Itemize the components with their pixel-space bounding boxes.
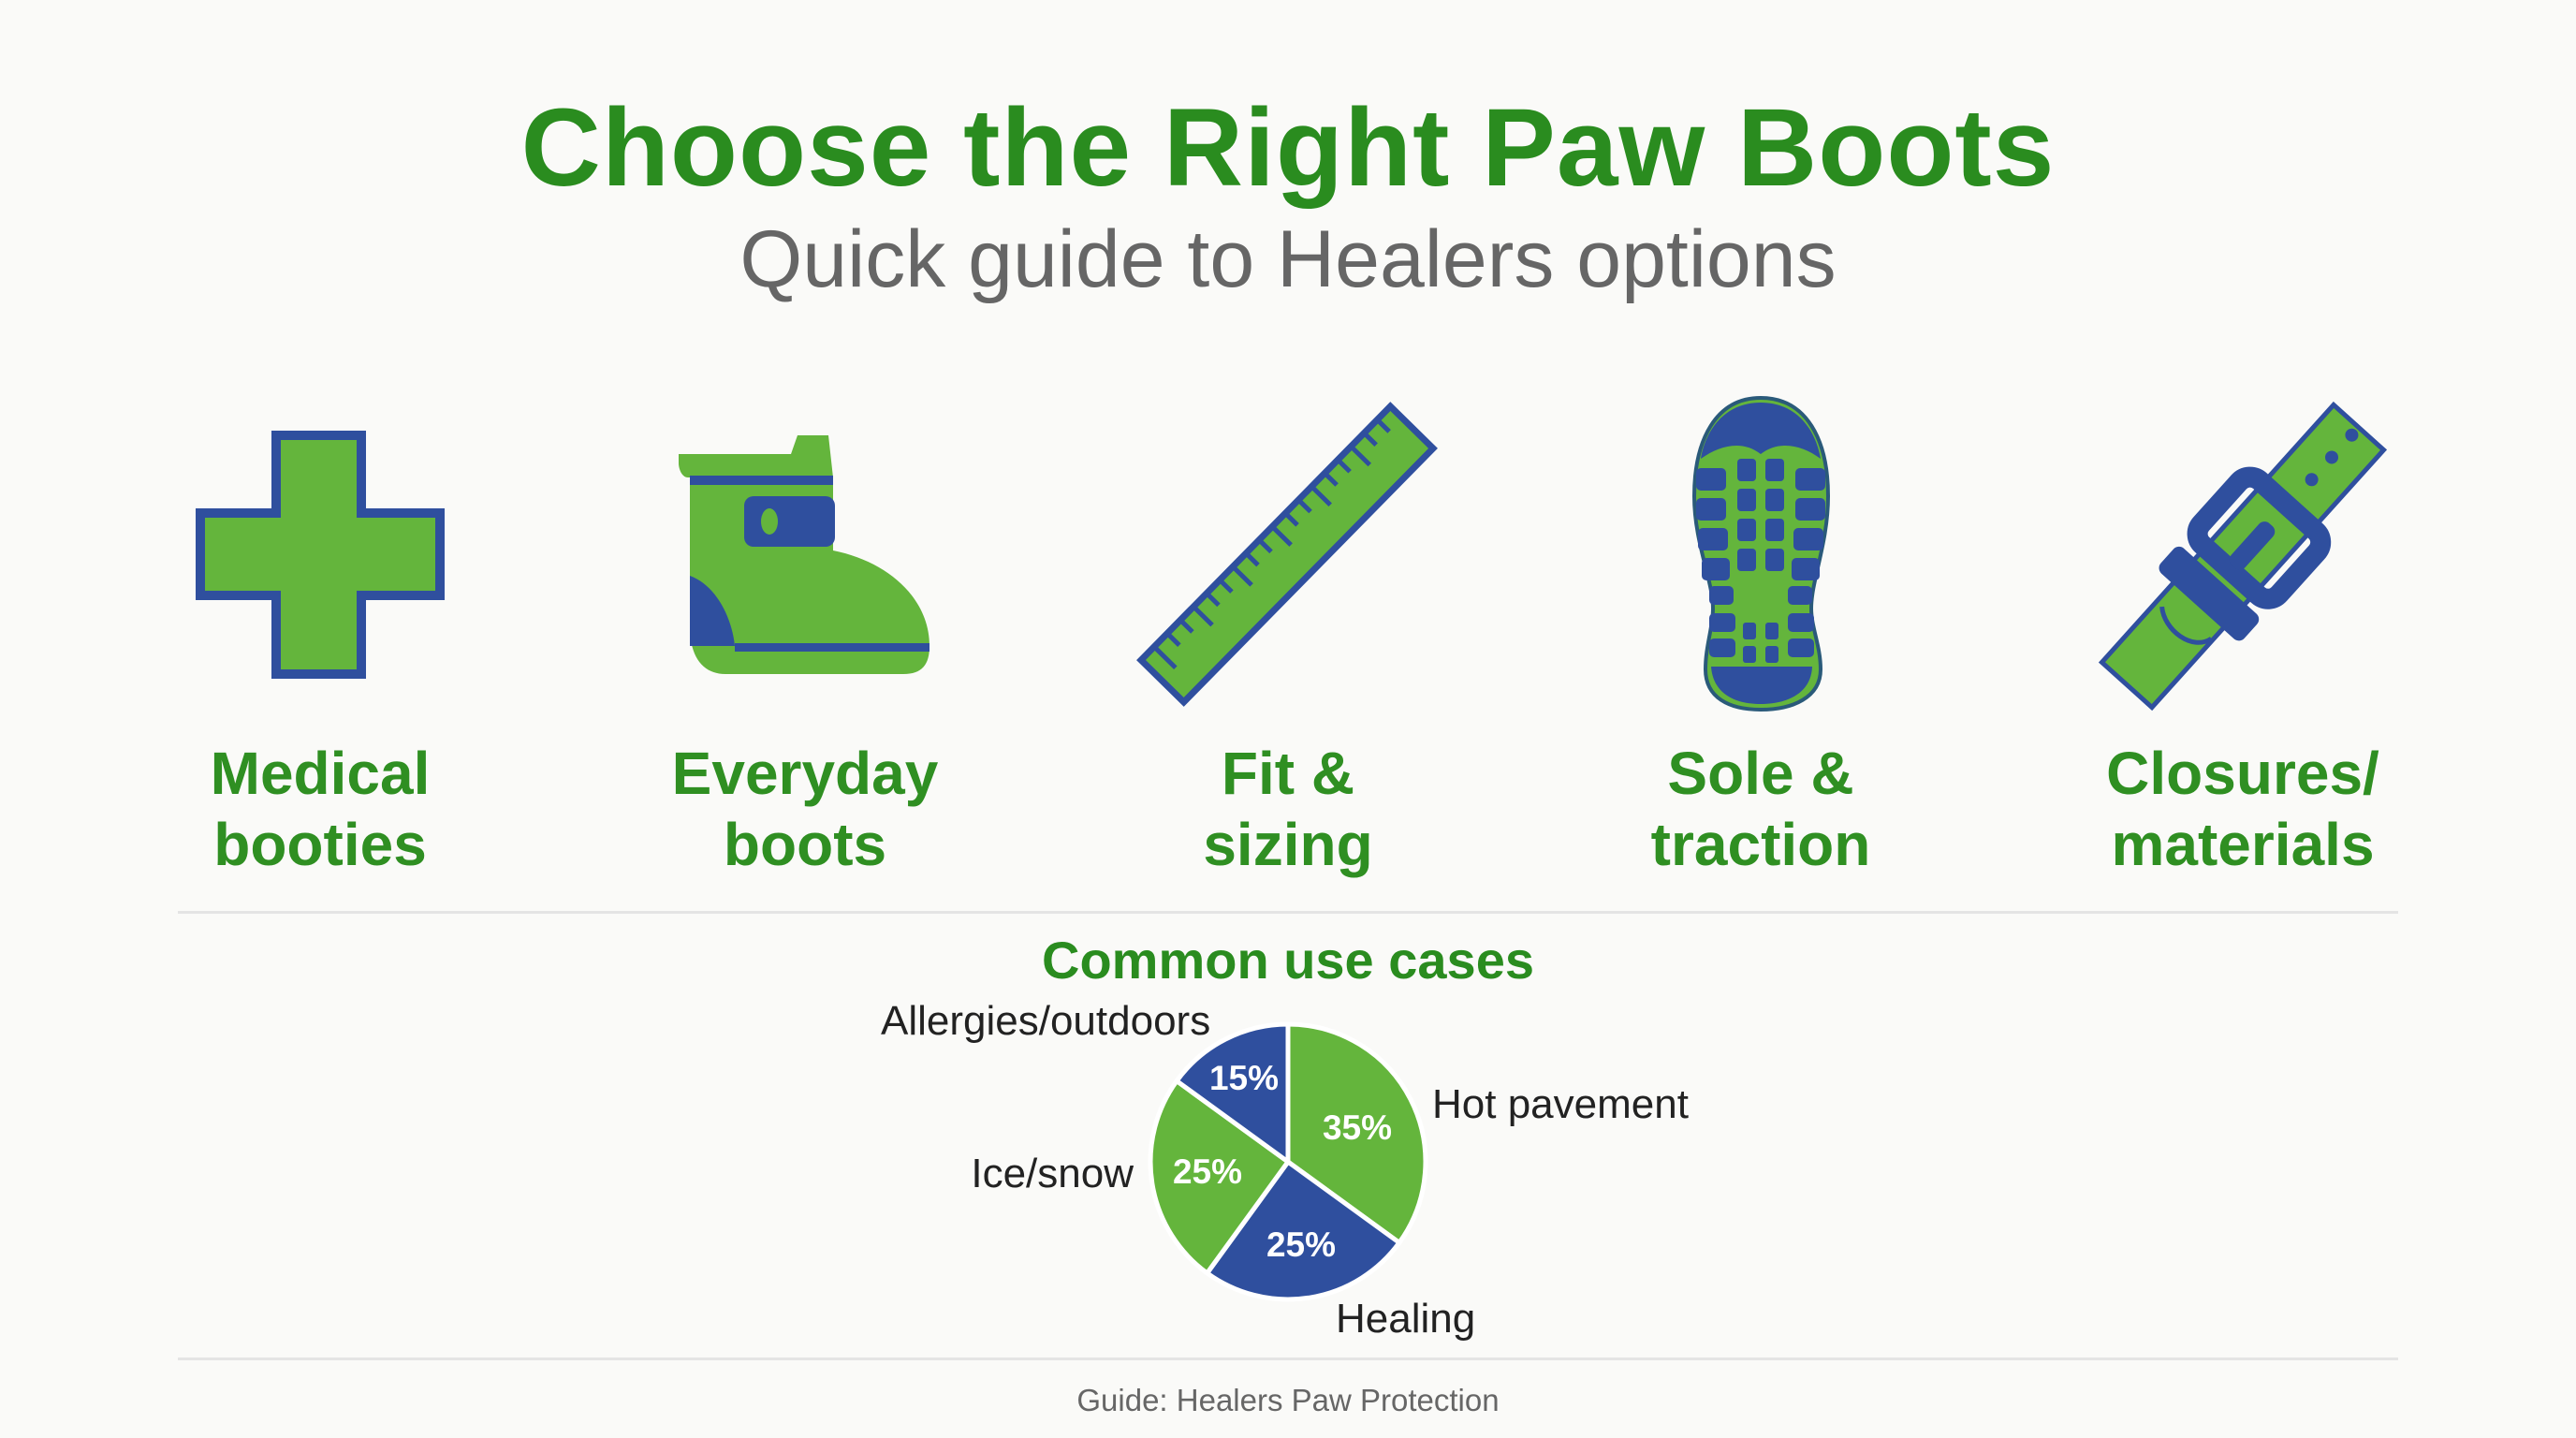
- label: everyday boots: boots: [724, 811, 886, 878]
- footer: Guide: Healers Paw Protection: [1076, 1383, 1500, 1417]
- label: closures/materials: materials: [2111, 811, 2375, 878]
- label: medical booties: Medical: [211, 740, 430, 807]
- pie chart: Allergies/outdoors: [881, 998, 1210, 1044]
- label: everyday boots: [672, 740, 938, 878]
- label: medical booties: [211, 740, 430, 878]
- label: sole & traction: Sole &: [1667, 740, 1854, 807]
- pie chart: 15%: [1209, 1059, 1279, 1097]
- label: sole & traction: [1651, 740, 1870, 878]
- label: medical booties: booties: [213, 811, 427, 878]
- label: closures/materials: [2106, 740, 2379, 878]
- title: Choose the Right Paw Boots: [521, 86, 2055, 210]
- label: closures/materials: Closures/: [2106, 740, 2379, 807]
- pie chart: 25%: [1173, 1152, 1242, 1191]
- pie chart: Ice/snow: [971, 1151, 1134, 1196]
- pie chart: [881, 998, 1689, 1342]
- pie chart: Hot pavement: [1432, 1081, 1689, 1127]
- subtitle: Quick guide to Healers options: [739, 214, 1837, 304]
- label: fit & sizing: Fit &: [1222, 740, 1354, 807]
- label: fit & sizing: [1203, 740, 1373, 878]
- icon: everyday boot: [679, 435, 929, 674]
- icon: ruler: [1141, 406, 1433, 702]
- chart heading: Common use cases: [1042, 931, 1534, 990]
- icon: medical cross: [200, 435, 440, 674]
- label: fit & sizing: sizing: [1203, 811, 1373, 878]
- label: everyday boots: Everyday: [672, 740, 938, 807]
- icon: sole: [1694, 398, 1828, 710]
- pie chart: 35%: [1323, 1108, 1392, 1147]
- label: sole & traction: traction: [1651, 811, 1870, 878]
- pie chart: 25%: [1266, 1225, 1336, 1264]
- pie chart: Healing: [1336, 1296, 1475, 1342]
- icon: belt buckle: [2086, 389, 2400, 723]
